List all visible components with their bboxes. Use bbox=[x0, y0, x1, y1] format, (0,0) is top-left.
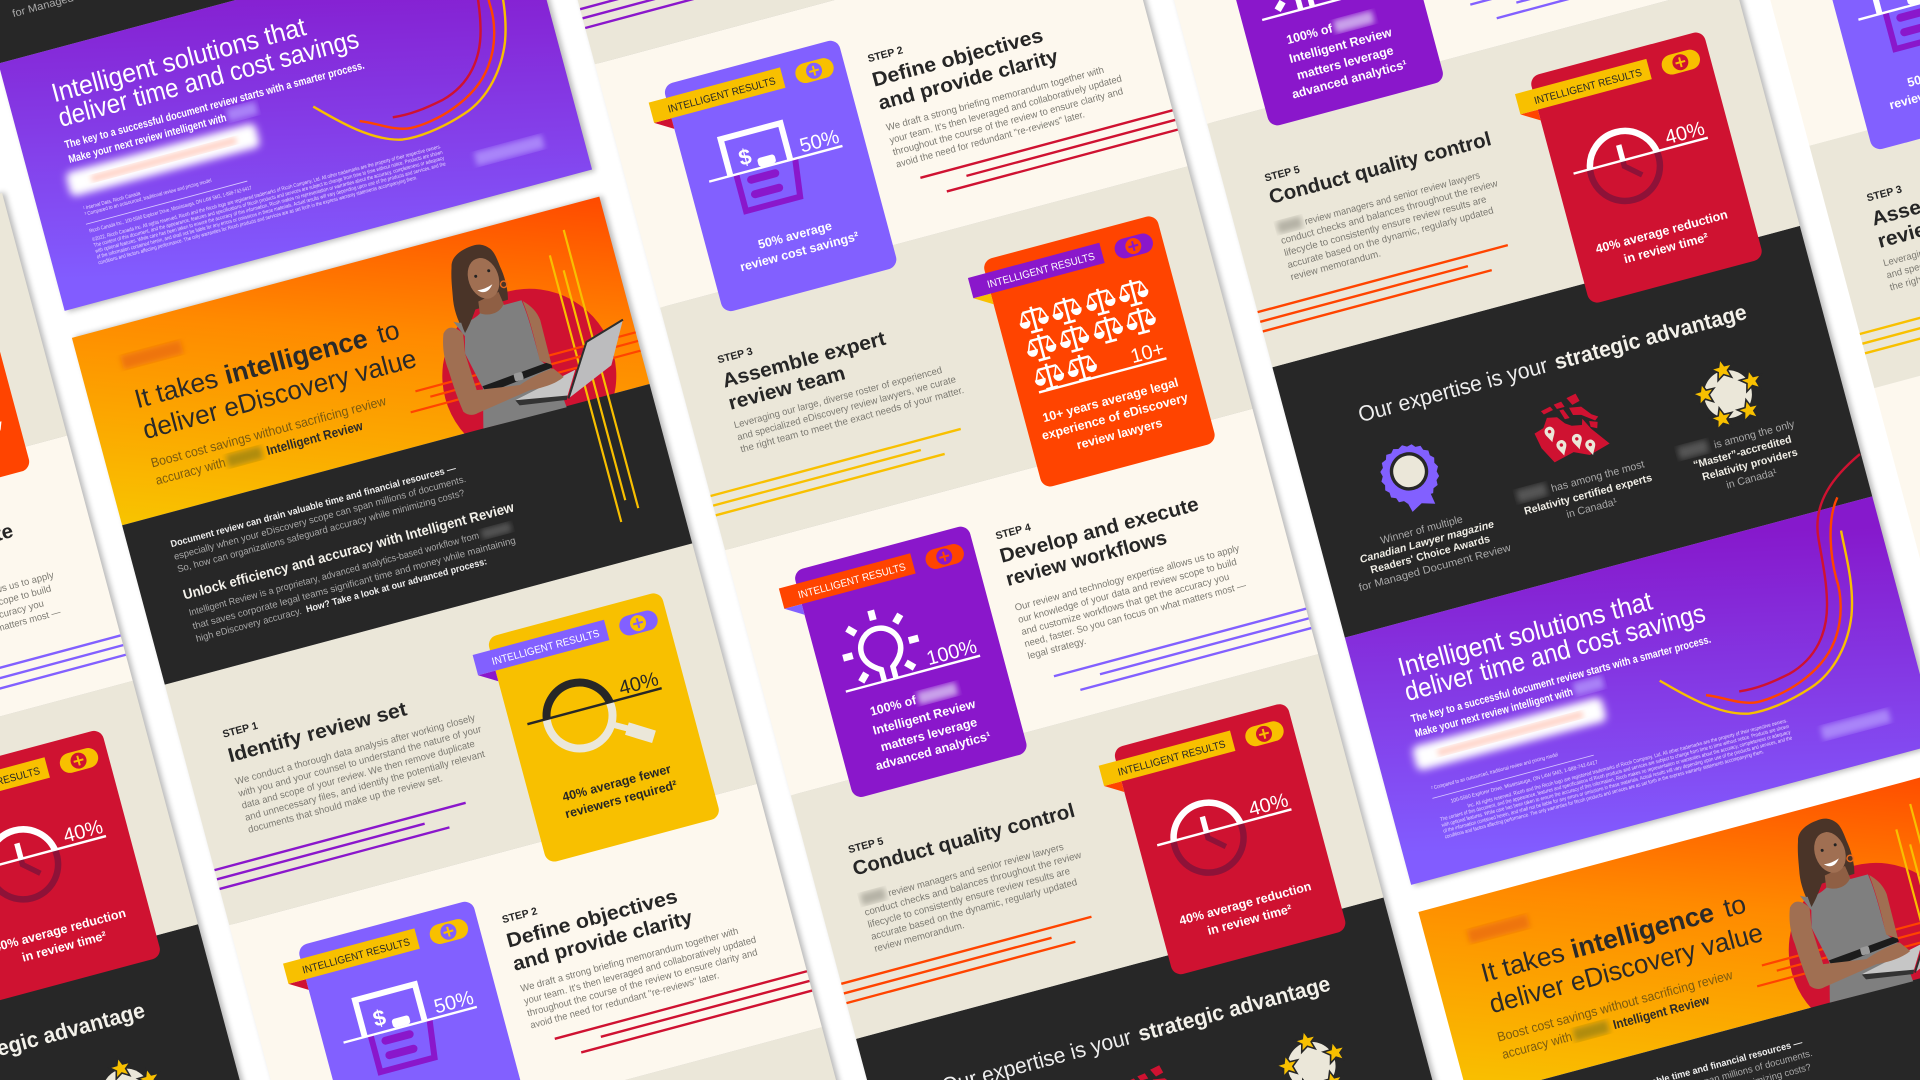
footnotes: ² Compared to an outsourced, traditional review and pricing model bbox=[84, 178, 212, 218]
caption: 50% average bbox=[757, 219, 833, 252]
icon: cost document bbox=[1870, 0, 1920, 51]
column 1: page strip with steps 3 to 5 bbox=[0, 192, 290, 1080]
text: step 2 body: avoid the need for redundant "re-reviews" later. bbox=[895, 109, 1086, 170]
heading: unlock efficiency: Unlock efficiency and accuracy with Intelligent Review bbox=[181, 499, 516, 603]
redacted logo text bbox=[226, 101, 258, 122]
caption bbox=[1883, 51, 1920, 112]
panel: step 3 bbox=[0, 193, 73, 599]
caption: advanced analytics¹ bbox=[874, 729, 992, 773]
heading: expertise bbox=[939, 971, 1333, 1080]
heading: step 2: STEP 2 bbox=[501, 905, 539, 926]
stat: 50%: 50% bbox=[432, 987, 476, 1018]
text: step 2 body: your team. It's then leveraged and collaboratively updated bbox=[888, 74, 1123, 146]
text: step 1 body: and unnecessary files, and identify the potentially relevant bbox=[244, 749, 486, 824]
decorative yellow lines bbox=[1891, 804, 1920, 1080]
panel: step 4 bbox=[1874, 247, 1920, 633]
footnotes bbox=[1429, 692, 1795, 841]
text: master accredited: “Master”-accredited bbox=[1692, 434, 1793, 471]
icon: clock bbox=[1166, 795, 1251, 880]
heading: step 4: Develop and execute bbox=[997, 493, 1201, 568]
heading: step 3: Assemble expert bbox=[720, 328, 888, 393]
heading: step 2: and provide clarity bbox=[876, 45, 1061, 115]
icon: award ribbon bbox=[1374, 438, 1448, 518]
text: step 4 body: Our review and technology expertise allows us to apply bbox=[1014, 543, 1241, 614]
stat: 40%: 40% bbox=[1246, 789, 1291, 821]
heading: expertise: strategic advantage bbox=[1135, 971, 1333, 1046]
footnotes: of the information contained herein, and shall not be liable for any errors or omissions in these materials. Actual results will vary depending upon use of the products and services, and the bbox=[1443, 735, 1793, 835]
heading: step 3: STEP 3 bbox=[1865, 183, 1903, 204]
ribbon bbox=[968, 243, 1108, 309]
text: step 2 body: your team. It's then leveraged and collaboratively updated bbox=[523, 935, 757, 1007]
text: step 5 body: lifecycle to consistently ensure review results are bbox=[867, 866, 1071, 931]
text: intro paragraph: especially when your eDiscovery scope can span millions of documents. bbox=[173, 474, 467, 563]
text: step 3 body: Leveraging our large, diverse roster of experienced bbox=[733, 365, 943, 431]
results card: cost savings bbox=[280, 900, 533, 1080]
ribbon: INTELLIGENT RESULTS bbox=[1117, 738, 1227, 779]
ribbon: INTELLIGENT RESULTS bbox=[797, 561, 907, 601]
text: step 5 body: conduct checks and balances throughout the review bbox=[1280, 178, 1500, 247]
text: step 5 body bbox=[860, 836, 1093, 955]
footnotes bbox=[81, 112, 448, 267]
column 2: banner, intro, step 1, step 2 bbox=[72, 196, 890, 1080]
photo: woman with laptop bbox=[1765, 787, 1920, 1008]
text: step 4 body: and customize workflows that get the accuracy you bbox=[1020, 572, 1231, 638]
stat: 40%: 40% bbox=[1663, 118, 1707, 149]
stat: 10+: 10+ bbox=[1128, 338, 1167, 368]
footnotes: with optional features. While care has been taken to ensure the accuracy of this information, Ricoh makes no representation or warranties about the accuracy, completeness or adequacy bbox=[95, 155, 445, 255]
icon: Canada map bbox=[1111, 1060, 1195, 1080]
footnotes: Inc. All rights reserved. Ricoh and the Ricoh logo are registered trademarks of Ricoh Company, Ltd. All other trademarks are the property of their respective owners. bbox=[1467, 718, 1788, 809]
plus pill bbox=[58, 746, 100, 775]
text: master accredited bbox=[1677, 416, 1807, 501]
plus pill bbox=[923, 542, 966, 571]
heading: step 2 bbox=[865, 6, 1061, 115]
heading: step 2: STEP 2 bbox=[866, 44, 904, 65]
panel: step 1 end bbox=[530, 0, 1122, 64]
column 2 top: purple closing panel of previous page bbox=[0, 0, 595, 313]
text: step 2 body bbox=[519, 922, 764, 1031]
text: step 5 body: lifecycle to consistently ensure review results are bbox=[1283, 194, 1488, 259]
redacted brand bbox=[1467, 914, 1530, 944]
ribbon bbox=[649, 67, 788, 134]
panel: intelligent solutions bbox=[0, 0, 592, 311]
text: certified experts: has among the most bbox=[1550, 458, 1646, 495]
plus pill bbox=[1659, 47, 1702, 77]
results card: review time bbox=[1512, 30, 1764, 310]
text: banner subhead: accuracy with bbox=[1500, 1029, 1574, 1062]
text: step 5 body bbox=[1276, 164, 1510, 283]
text: step 2 body: avoid the need for redundant "re-reviews" later. bbox=[529, 970, 720, 1031]
panel: step 3 bbox=[660, 166, 1258, 572]
text: key to a review: Make your next review intelligent with bbox=[67, 112, 228, 166]
icon: clock bbox=[0, 822, 66, 907]
panel: step 3 bbox=[1809, 4, 1920, 388]
results card: fewer reviewers bbox=[469, 591, 721, 868]
caption: in review time² bbox=[20, 929, 108, 965]
caption: review lawyers bbox=[1075, 416, 1164, 452]
text: step 2 body: throughout the course of the review to ensure clarity and bbox=[892, 86, 1124, 158]
text: step 5 body: review managers and senior review lawyers bbox=[1304, 170, 1481, 228]
heading: step 4: review workflows bbox=[1004, 527, 1169, 591]
heading: intelligent solutions: Intelligent solutions that bbox=[1395, 585, 1656, 682]
panel: orange banner bbox=[1418, 771, 1920, 1080]
panel: intro bbox=[1469, 958, 1920, 1080]
caption bbox=[1276, 5, 1409, 102]
red circle bbox=[423, 269, 636, 482]
icon: light bulb bbox=[833, 600, 927, 690]
photo: woman with laptop bbox=[418, 213, 641, 434]
text: intro paragraph: Document review can drain valuable time and financial resources — bbox=[169, 463, 458, 550]
dollar sign: $ bbox=[370, 1004, 389, 1032]
icon: cost document bbox=[355, 983, 439, 1074]
panel: intro bbox=[122, 384, 692, 685]
red circle bbox=[1769, 843, 1920, 1056]
heading: step 5: Conduct quality control bbox=[850, 800, 1077, 880]
text: step 5 body: review memorandum. bbox=[1289, 248, 1382, 283]
heading: step 1: Identify review set bbox=[226, 698, 410, 767]
heading: intelligent solutions: deliver time and cost savings bbox=[1401, 598, 1708, 707]
caption: in review time² bbox=[1206, 902, 1293, 938]
redacted logo bbox=[474, 134, 545, 166]
text: step 1 body: data and scope of your review. We then remove duplicate bbox=[241, 739, 476, 812]
heading: banner: to bbox=[1720, 889, 1749, 923]
footnotes: conditions and factors affecting performance. The only warranties for Ricoh products and services are as set forth in the express warranty statements accompanying them. bbox=[98, 175, 418, 266]
caption bbox=[1036, 374, 1194, 460]
icon: clock bbox=[1582, 123, 1668, 209]
text: certified experts: Relativity certified experts bbox=[1523, 472, 1654, 518]
panel: expertise bbox=[856, 898, 1456, 1080]
caption: Intelligent Review bbox=[871, 697, 977, 738]
caption: review cost savings² bbox=[739, 229, 860, 274]
heading: step 3 bbox=[716, 311, 894, 415]
text: award: Canadian Lawyer magazine bbox=[1359, 518, 1495, 566]
text: master accredited: Relativity providers bbox=[1701, 446, 1799, 483]
caption: experience of eDiscovery bbox=[1040, 390, 1190, 443]
heading: expertise: Our expertise is your bbox=[1355, 352, 1550, 427]
plus pill bbox=[617, 608, 660, 638]
results card: review time bbox=[1095, 702, 1348, 981]
footnotes: ©2022, Ricoh Canada Inc. All rights reserved. Ricoh and the Ricoh logo are registered trademarks of Ricoh Company, Ltd. All other trademarks are the property of their respective owners. bbox=[91, 143, 442, 243]
redacted brand bbox=[120, 340, 184, 370]
heading: step 3: review team bbox=[726, 362, 848, 415]
text: step 5 body: review managers and senior review lawyers bbox=[887, 842, 1065, 899]
footnotes: 100-5560 Explorer Drive, Mississauga, ON L4W 5M3, 1-888-742-6417 bbox=[1450, 760, 1599, 805]
heading: expertise bbox=[1355, 299, 1749, 427]
caption: advanced analytics¹ bbox=[1290, 57, 1409, 102]
heading: banner: It takes bbox=[1478, 937, 1567, 988]
ribbon: INTELLIGENT RESULTS bbox=[301, 936, 411, 977]
results card: advanced analytics bbox=[1209, 0, 1445, 128]
footnotes: with optional features. While care has been taken to ensure the accuracy of this information, Ricoh makes no representation or warranties about the accuracy, completeness or adequacy bbox=[1441, 730, 1792, 829]
heading: step 3: STEP 3 bbox=[716, 345, 754, 366]
icon: cost document bbox=[721, 122, 805, 213]
heading: step 2: Define objectives bbox=[870, 25, 1046, 92]
ribbon: INTELLIGENT RESULTS bbox=[667, 75, 777, 116]
redacted logo bbox=[1820, 709, 1891, 740]
ribbon bbox=[0, 757, 53, 823]
column 4: step 5, expertise, closing panel bbox=[1141, 0, 1920, 887]
ribbon bbox=[1099, 731, 1238, 797]
text: step 2 body: throughout the course of the review to ensure clarity and bbox=[526, 947, 759, 1019]
redacted logo text bbox=[1572, 676, 1605, 696]
text: step 2 body bbox=[885, 61, 1130, 170]
footnotes: Ricoh Canada Inc., 100-5560 Explorer Drive, Mississauga, ON L4W 5M3, 1-888-742-6417 bbox=[89, 185, 253, 235]
caption: 100% of bbox=[868, 693, 919, 719]
results card: advanced analytics bbox=[775, 524, 1029, 804]
ribbon bbox=[779, 553, 918, 619]
plus pill bbox=[793, 56, 836, 85]
panel: step 4 bbox=[725, 409, 1323, 815]
text: step 1 body: with you and your counsel to understand the nature of your bbox=[236, 724, 483, 800]
heading: step 2: Define objectives bbox=[504, 886, 680, 952]
panel: step 2 bbox=[595, 0, 1193, 329]
ribbon bbox=[1515, 59, 1655, 125]
text: award: Winner of multiple bbox=[1379, 513, 1464, 547]
plus pill bbox=[1243, 719, 1286, 748]
column 5: steps 2 to 4 bbox=[1744, 0, 1920, 633]
results card: cost savings bbox=[645, 39, 899, 318]
text: award: Readers' Choice Awards bbox=[1369, 533, 1491, 576]
text: master accredited: in Canada¹ bbox=[1725, 466, 1779, 491]
text: step 4 body bbox=[1014, 543, 1254, 662]
icon: stars bbox=[1686, 350, 1772, 433]
heading: step 5: STEP 5 bbox=[1263, 164, 1301, 185]
caption bbox=[860, 677, 992, 773]
text: key to a review: Make your next review intelligent with bbox=[1414, 686, 1574, 740]
text: intro paragraph: So, how can organizations safeguard accuracy while minimizing costs? bbox=[176, 488, 466, 575]
panel: step 1 bbox=[165, 543, 763, 947]
curved lines bbox=[1616, 454, 1918, 734]
caption: reviewers required² bbox=[564, 778, 679, 821]
ribbon: INTELLIGENT RESULTS bbox=[491, 628, 601, 668]
text: key to a review: The key to a successful document review starts with a smarter process. bbox=[63, 60, 366, 151]
decorative orange lines bbox=[1752, 906, 1920, 986]
text: banner subhead: Intelligent Review bbox=[1611, 992, 1712, 1032]
panel: step 4 bbox=[0, 435, 133, 822]
heading: step 2 bbox=[500, 867, 696, 976]
panel: step 2 bbox=[229, 784, 828, 1080]
text: banner subhead: Boost cost savings without sacrificing review bbox=[1496, 967, 1735, 1045]
text: process intro: How? Take a look at our advanced process: bbox=[305, 556, 488, 615]
heading: step 5: STEP 5 bbox=[847, 835, 885, 856]
heading: banner: deliver eDiscovery value bbox=[1486, 917, 1766, 1019]
results card: legal experience bbox=[965, 214, 1217, 493]
text: banner subhead: accuracy with bbox=[154, 455, 227, 488]
heading: step 3 bbox=[1865, 149, 1920, 253]
icon: Canada map bbox=[1527, 388, 1611, 468]
text: banner subhead: Boost cost savings without sacrificing review bbox=[149, 393, 388, 470]
text: step 2 body: We draft a strong briefing memorandum together with bbox=[885, 65, 1105, 134]
panel: expertise bbox=[0, 924, 270, 1080]
heading: banner: to bbox=[374, 315, 403, 349]
text: key to a review bbox=[63, 60, 370, 166]
column 3: steps 2 to 5 bbox=[530, 0, 1459, 1080]
ribbon bbox=[473, 620, 612, 686]
dollar sign: $ bbox=[736, 143, 754, 171]
panel: step 5 bbox=[0, 681, 204, 1080]
heading: step 4 bbox=[993, 478, 1207, 591]
caption: 40% average reduction bbox=[1178, 879, 1313, 928]
stat: 40%: 40% bbox=[617, 668, 661, 700]
text: step 4 body: legal strategy. bbox=[1027, 636, 1087, 662]
results card: cost savings bbox=[1812, 0, 1920, 151]
panel: step 4 end bbox=[1141, 0, 1740, 143]
text: step 3 body: the right team to meet the exact needs of your matter. bbox=[739, 385, 965, 455]
icon: stars bbox=[1269, 1022, 1355, 1080]
caption: 10+ years average legal bbox=[1041, 375, 1180, 425]
footnotes: ² Compared to an outsourced, traditional review and pricing model bbox=[1431, 752, 1559, 792]
caption bbox=[559, 761, 679, 821]
text: step 5 body: accurate based on the dynamic, regularly updated bbox=[870, 877, 1078, 943]
footnotes: The content of this document, and the appearance, features and specifications of Ricoh products and services are subject to change from time to time without notice. Products are shown bbox=[93, 150, 443, 249]
ribbon: INTELLIGENT RESULTS bbox=[986, 251, 1096, 291]
footnotes: of the information contained herein, and shall not be liable for any errors or omissions in these materials. Actual results will vary depending upon use of the products and services, and the bbox=[96, 161, 447, 261]
ribbon: INTELLIGENT RESULTS bbox=[1533, 67, 1643, 107]
panel: step 3 top bbox=[294, 1027, 887, 1080]
heading: step 2: and provide clarity bbox=[510, 906, 696, 976]
text: process intro: that saves corporate legal teams significant time and money while maintaining bbox=[191, 535, 517, 632]
text: step 4 body: need, faster. So you can focus on what matters most — bbox=[1023, 580, 1248, 650]
panel: intelligent solutions bbox=[1333, 454, 1920, 885]
text: process intro: high eDiscovery accuracy. bbox=[195, 606, 303, 645]
panel: expertise remnant bbox=[0, 0, 526, 64]
footnotes: ¹ Internal Data, Ricoh Canada bbox=[83, 191, 141, 212]
caption: 40% average reduction bbox=[1594, 207, 1729, 256]
text: award: for Managed Document Review bbox=[1358, 542, 1513, 594]
redacted link bbox=[65, 122, 261, 197]
heading: step 5: Conduct quality control bbox=[1267, 128, 1494, 209]
text: key to a review bbox=[1410, 634, 1716, 740]
text: step 1 body: We conduct a thorough data analysis after working closely bbox=[234, 713, 477, 788]
heading: step 4: STEP 4 bbox=[994, 521, 1032, 542]
heading: intelligent solutions: Intelligent solutions that bbox=[48, 11, 310, 108]
heading: banner: deliver eDiscovery value bbox=[139, 343, 420, 445]
panel: expertise bbox=[1272, 226, 1872, 638]
heading: banner: intelligence bbox=[221, 323, 371, 390]
heading: banner: It takes bbox=[131, 363, 221, 414]
text: banner subhead: Intelligent Review bbox=[265, 418, 365, 458]
results card: legal experience bbox=[0, 241, 31, 515]
panel: orange banner bbox=[72, 197, 662, 572]
panel: step 5 bbox=[1207, 0, 1805, 388]
text: key to a review: The key to a successful document review starts with a smarter process. bbox=[1410, 634, 1712, 726]
footnotes: conditions and factors affecting performance. The only warranties for Ricoh products and services are as set forth in the express warranty statements accompanying them. bbox=[1444, 749, 1765, 840]
heading: expertise: strategic advantage bbox=[1552, 299, 1749, 375]
caption: matters leverage bbox=[1295, 43, 1395, 83]
decorative yellow lines bbox=[544, 230, 641, 522]
text: certified experts: in Canada¹ bbox=[1565, 496, 1619, 521]
icon: light bulb bbox=[1249, 0, 1343, 18]
caption: 40% average fewer bbox=[561, 762, 673, 804]
text: step 5 body: conduct checks and balances throughout the review bbox=[863, 850, 1084, 919]
ribbon bbox=[283, 928, 423, 994]
stat: 50%: 50% bbox=[797, 126, 842, 158]
icon: stars bbox=[84, 1048, 170, 1080]
results card: review time bbox=[0, 729, 162, 1008]
text: certified experts bbox=[1516, 455, 1657, 532]
text: process intro: Intelligent Review is a proprietary, advanced analytics-based workflow from bbox=[188, 530, 480, 619]
text: step 4 body bbox=[0, 570, 68, 689]
decorative orange lines bbox=[406, 332, 641, 412]
text: step 1 body: documents that should make up the review set. bbox=[247, 773, 444, 836]
heading: intelligent solutions: deliver time and cost savings bbox=[55, 24, 362, 133]
text: step 5 body: review memorandum. bbox=[873, 920, 966, 955]
plus pill bbox=[427, 917, 470, 946]
stat: 100%: 100% bbox=[924, 636, 980, 670]
caption: 100% of bbox=[1285, 21, 1335, 47]
text: step 5 body: accurate based on the dynamic, regularly updated bbox=[1286, 205, 1495, 271]
panel: step 5 bbox=[791, 654, 1389, 1060]
text: step 3 body: and specialized eDiscovery review lawyers, we curate bbox=[736, 374, 957, 443]
caption: matters leverage bbox=[879, 715, 979, 754]
panel: step 2 bbox=[1744, 0, 1920, 167]
footnotes: The content of this document, and the appearance, features and specifications of Ricoh products and services are subject to change from time to time without notice. Products are shown bbox=[1440, 724, 1790, 823]
column 4 bottom: next page banner and intro bbox=[1418, 771, 1920, 1080]
text: step 4 body: our knowledge of your data and review scope to build bbox=[1017, 557, 1238, 626]
icon: scales bbox=[1016, 276, 1166, 392]
curved lines bbox=[270, 0, 571, 160]
redacted link bbox=[1411, 696, 1607, 771]
caption: in review time² bbox=[1622, 230, 1710, 266]
icon: magnifying glass bbox=[539, 666, 654, 763]
heading: banner: intelligence bbox=[1567, 897, 1717, 964]
text: award bbox=[1347, 503, 1513, 594]
heading: step 1: STEP 1 bbox=[221, 720, 259, 741]
plus pill bbox=[1112, 231, 1155, 261]
stat: 40%: 40% bbox=[61, 816, 105, 848]
text: master accredited: is among the only bbox=[1713, 418, 1797, 451]
text: step 1 body bbox=[233, 712, 493, 836]
text: step 2 body: We draft a strong briefing memorandum together with bbox=[519, 926, 740, 995]
caption: Intelligent Review bbox=[1288, 25, 1394, 66]
